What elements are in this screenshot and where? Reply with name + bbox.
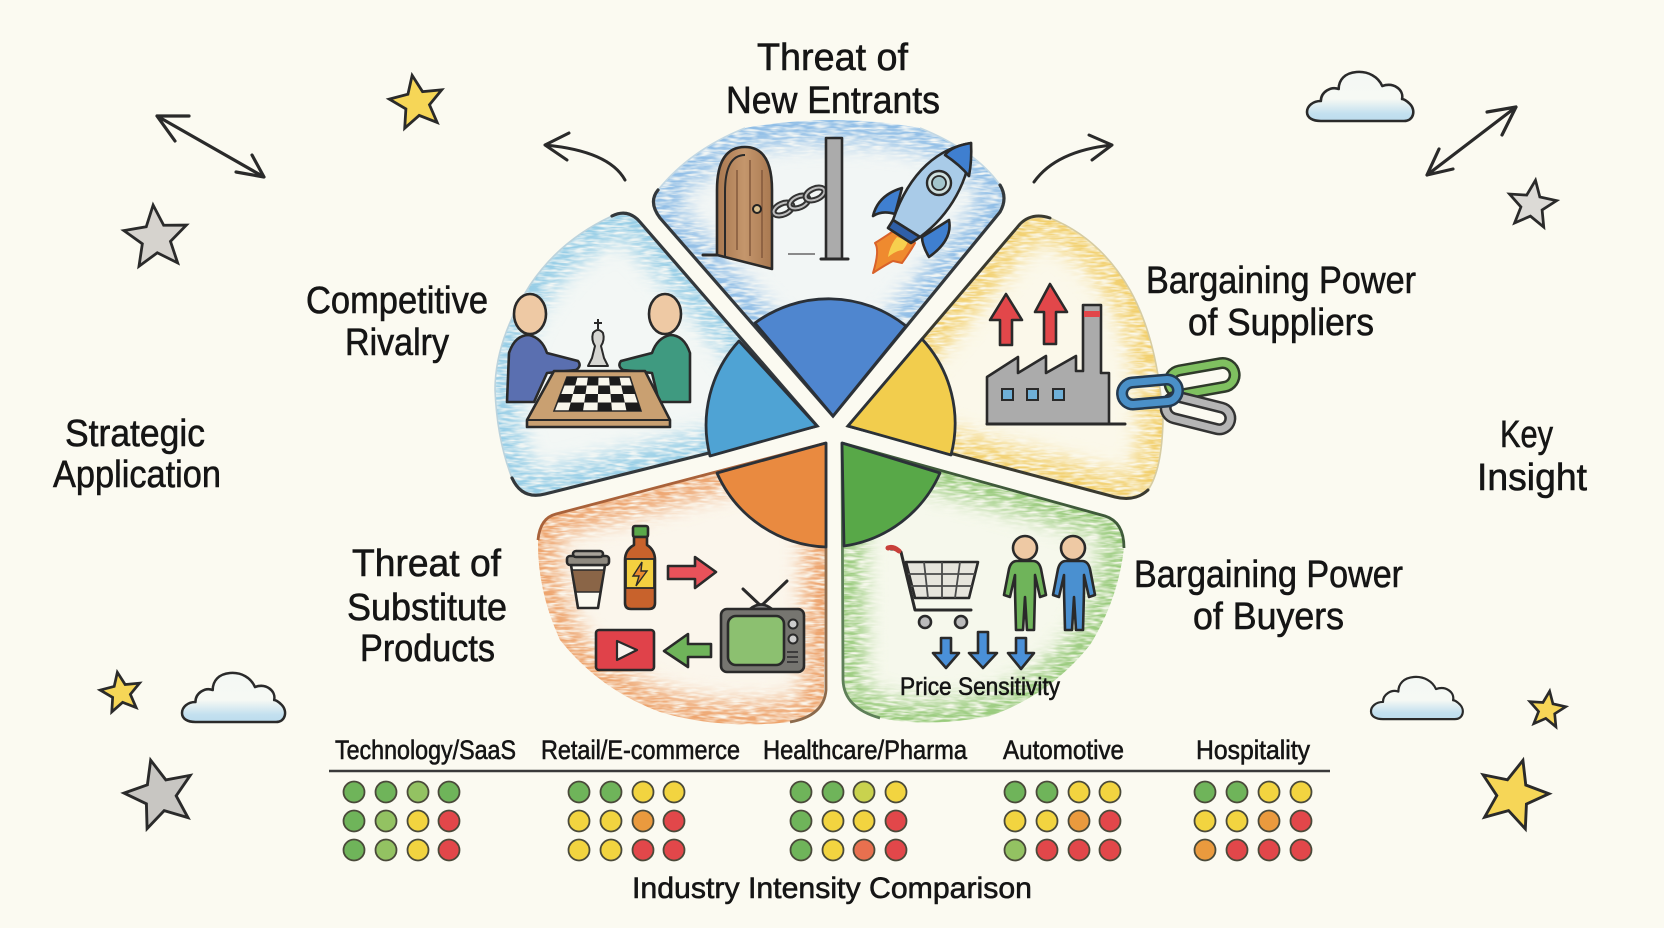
hub segment: substitutes: [717, 443, 826, 547]
icon: yellow star small right: [1527, 689, 1568, 728]
chess king: [588, 319, 608, 366]
text: price sensitivity: Price Sensitivity: [900, 673, 1060, 701]
heading: threat of new entrants: New Entrants: [726, 80, 940, 122]
icon: shopping cart: [888, 547, 978, 628]
icon: price down arrows: [933, 632, 1034, 669]
panel: substitutes wedge: [538, 443, 826, 724]
heading: threat of new entrants: Threat of: [757, 37, 908, 79]
arrow: double left: [157, 116, 264, 177]
icon: television: [721, 581, 804, 672]
arrow: double right: [1427, 107, 1516, 175]
hub segment: new entrants: [755, 299, 906, 416]
arrow: curved top left: [545, 133, 625, 180]
icon: chess players: [507, 294, 690, 427]
icon: yellow star bottom left: [98, 669, 144, 713]
heading: bargaining power of buyers: of Buyers: [1193, 596, 1344, 638]
dot matrix: technology/saas: [344, 782, 460, 860]
heading: bargaining power of buyers: Bargaining Power: [1134, 554, 1403, 596]
icon: red up arrows: [990, 284, 1067, 345]
icon: energy drink bottle: [625, 526, 655, 609]
icon: yellow star large right: [1472, 751, 1556, 832]
icon: chained door: [703, 138, 848, 269]
heading: strategic application: Application: [53, 454, 221, 496]
icon: rocket: [873, 143, 971, 273]
panel: supplier power wedge: [848, 216, 1163, 498]
icon: video play button: [596, 630, 654, 670]
heading: threat of substitute products: Substitute: [347, 587, 507, 629]
panel: buyer power wedge: [842, 443, 1124, 723]
heading: strategic application: Strategic: [65, 413, 205, 455]
icon: supply chain links: [1121, 361, 1237, 432]
heading: key insight: Insight: [1477, 457, 1587, 499]
industry labels: Hospitality: [1196, 735, 1310, 765]
icon: cloud bottom right: [1371, 677, 1463, 719]
panel: competitive rivalry wedge: [495, 213, 817, 495]
icon: grey star right: [1506, 177, 1559, 228]
heading: industry intensity comparison: Industry Intensity Comparison: [632, 872, 1032, 905]
barrier post: [826, 138, 842, 259]
icon: coffee cup: [567, 551, 609, 608]
icon: cloud bottom left: [182, 673, 285, 722]
icon: cloud top right: [1307, 72, 1413, 121]
dot matrix: automotive: [1004, 782, 1120, 860]
heading: threat of substitute products: Threat of: [352, 543, 501, 585]
hub segment: suppliers: [848, 339, 955, 455]
arrow: red substitute arrow: [668, 557, 716, 588]
arrow: green substitute arrow: [664, 634, 711, 667]
industry labels: Healthcare/Pharma: [763, 735, 968, 765]
icon: green buyer: [1004, 536, 1046, 630]
heading: competitive rivalry: Competitive: [306, 280, 488, 322]
dot matrix: healthcare/pharma: [790, 782, 906, 860]
dot matrix: hospitality: [1194, 782, 1312, 860]
industry labels: Retail/E-commerce: [541, 735, 740, 765]
heading: threat of substitute products: Products: [360, 628, 495, 670]
heading: key insight: Key: [1500, 414, 1553, 456]
chess board: [527, 371, 670, 427]
icon: factory: [987, 305, 1125, 424]
industry labels: Automotive: [1003, 735, 1124, 765]
heading: bargaining power of suppliers: of Suppliers: [1188, 302, 1374, 344]
industry labels: Technology/SaaS: [335, 735, 516, 765]
icon: blue buyer: [1053, 536, 1095, 630]
hub segment: buyers: [842, 443, 940, 546]
hub segment: rivalry: [706, 341, 817, 456]
chain: [772, 185, 826, 218]
heading: competitive rivalry: Rivalry: [345, 322, 449, 364]
right player: [619, 294, 690, 402]
panel: threat of new entrants wedge: [653, 120, 1004, 416]
dot matrix: retail/e-commerce: [568, 782, 684, 860]
icon: yellow star top left: [386, 71, 447, 130]
industry labels: [335, 735, 1310, 765]
icon: grey star left: [122, 202, 190, 267]
left player: [507, 294, 580, 402]
icon: grey star bottom left: [118, 751, 201, 832]
heading: bargaining power of suppliers: Bargaining Power: [1146, 260, 1416, 302]
arrow: curved top right: [1034, 135, 1112, 182]
